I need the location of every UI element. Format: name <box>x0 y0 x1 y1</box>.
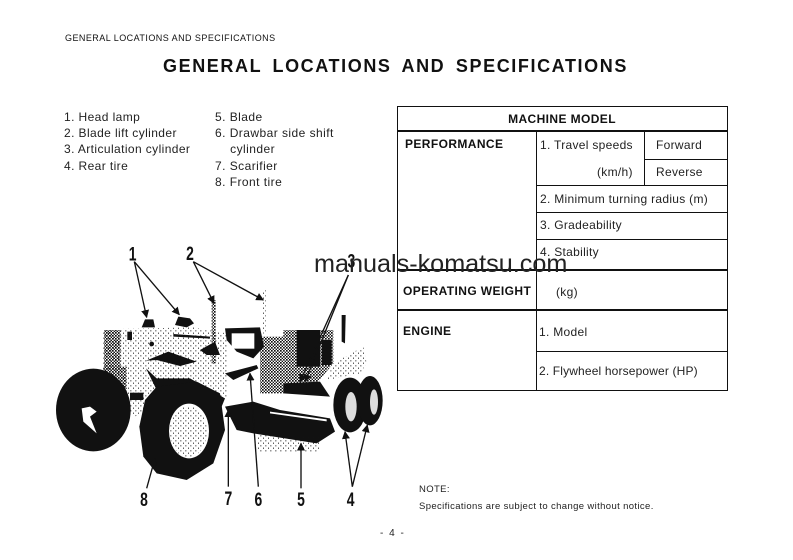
forward: Forward <box>656 138 702 152</box>
callout numbers: 1 <box>129 243 137 265</box>
page number: - 4 - <box>380 528 405 539</box>
parts list: left column <box>64 110 190 173</box>
parts list: right column <box>215 110 334 189</box>
gradeability: 3. Gradeability <box>540 218 622 232</box>
callout numbers: 8 <box>140 489 148 511</box>
reverse: Reverse <box>656 165 703 179</box>
callout numbers: 3 <box>347 250 355 272</box>
parts list: right column: 6. Drawbar side shift <box>215 126 334 140</box>
specifications table <box>397 106 728 391</box>
title: GENERAL LOCATIONS AND SPECIFICATIONS <box>163 56 628 76</box>
parts list: left column: 4. Rear tire <box>64 159 128 173</box>
rear tires <box>333 376 383 432</box>
running header: GENERAL LOCATIONS AND SPECIFICATIONS <box>65 33 276 43</box>
blade <box>225 397 335 452</box>
machine illustration with callouts <box>56 243 383 511</box>
parts list: right column: 5. Blade <box>215 110 263 124</box>
parts list: left column: 3. Articulation cylinder <box>64 142 190 156</box>
callout numbers: 2 <box>186 243 194 265</box>
front tire (near side) <box>139 382 225 480</box>
note: NOTE: <box>419 484 450 495</box>
callout numbers: 5 <box>297 489 305 511</box>
parts list: right column: cylinder <box>230 142 275 156</box>
front tire (far side) <box>56 369 131 451</box>
row label: operating weight: OPERATING WEIGHT <box>403 284 531 298</box>
header label: MACHINE MODEL <box>508 112 616 126</box>
callout numbers: 6 <box>254 489 262 511</box>
flywheel horsepower: 2. Flywheel horsepower (HP) <box>539 364 698 378</box>
parts list: left column: 2. Blade lift cylinder <box>64 126 177 140</box>
parts list: right column: 8. Front tire <box>215 175 282 189</box>
minimum turning radius: 2. Minimum turning radius (m) <box>540 192 708 206</box>
callout arrows <box>134 262 367 488</box>
engine model: 1. Model <box>539 325 587 339</box>
stability: 4. Stability <box>540 245 599 259</box>
travel speed unit: (km/h) <box>597 165 633 179</box>
travel speeds: 1. Travel speeds <box>540 138 633 152</box>
callout numbers: 4 <box>347 489 355 511</box>
callout numbers <box>129 243 355 511</box>
head lamps <box>142 319 155 327</box>
note: Specifications are subject to change without notice. <box>419 501 654 512</box>
row label: performance: PERFORMANCE <box>405 137 503 151</box>
row label: engine: ENGINE <box>403 324 451 338</box>
watermark: manuals-komatsu.com <box>314 250 567 278</box>
machine body <box>103 290 367 417</box>
parts list: right column: 7. Scarifier <box>215 159 278 173</box>
callout numbers: 7 <box>224 488 232 510</box>
weight unit: (kg) <box>556 285 578 299</box>
note <box>419 484 654 512</box>
parts list: left column: 1. Head lamp <box>64 110 140 124</box>
